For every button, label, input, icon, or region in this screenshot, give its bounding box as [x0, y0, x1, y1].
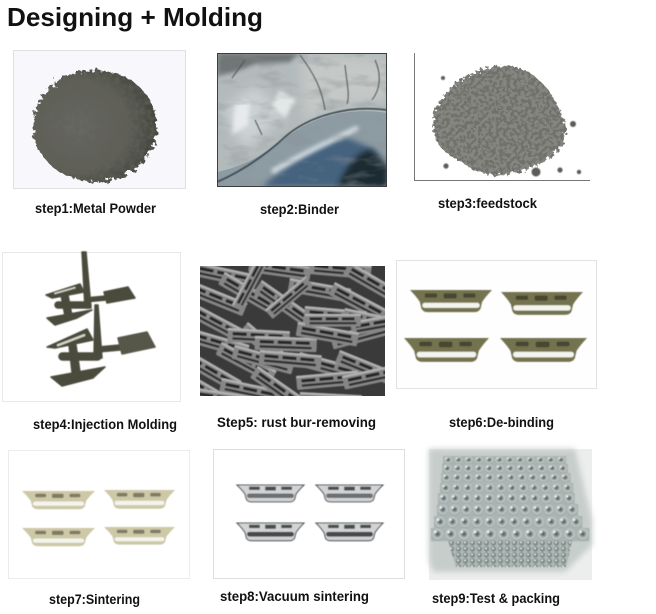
- icon: polished parts: [237, 485, 383, 541]
- label: step 3: step3:feedstock: [438, 196, 537, 211]
- panel: step 7 sintering: [8, 450, 190, 607]
- panel: step 9 test and packing: [429, 449, 592, 606]
- label: step 5: Step5: rust bur-removing: [217, 415, 376, 430]
- panel: step 3 feedstock: [414, 53, 590, 211]
- label: step 2: step2:Binder: [260, 202, 340, 217]
- panel: step 1 metal powder: [14, 50, 186, 216]
- label: step 4: step4:Injection Molding: [33, 417, 177, 432]
- icon: powder pile: [33, 70, 157, 182]
- title: Designing + Molding: [7, 2, 263, 32]
- icon: sintered parts: [22, 490, 175, 546]
- label: step 7: step7:Sintering: [49, 592, 140, 607]
- icon: granule pile: [433, 66, 566, 175]
- label: step 9: step9:Test & packing: [432, 591, 560, 606]
- panel: step 5 rust bur-removing: [200, 266, 385, 430]
- label: step 6: step6:De-binding: [449, 415, 554, 430]
- panel: step 8 vacuum sintering: [214, 450, 404, 604]
- icon: molded parts on sprues: [46, 252, 155, 386]
- panel: step 2 binder: [217, 53, 387, 217]
- label: step 8: step8:Vacuum sintering: [220, 589, 369, 604]
- panel: step 4 injection molding: [2, 252, 180, 432]
- icon: green parts: [404, 290, 587, 362]
- image: pile of metal parts: [200, 266, 385, 396]
- icon: stray granules: [441, 76, 581, 176]
- panel: step 6 de-binding: [396, 260, 596, 430]
- label: step 1: step1:Metal Powder: [35, 201, 157, 216]
- image: tray of steel balls: [431, 456, 589, 567]
